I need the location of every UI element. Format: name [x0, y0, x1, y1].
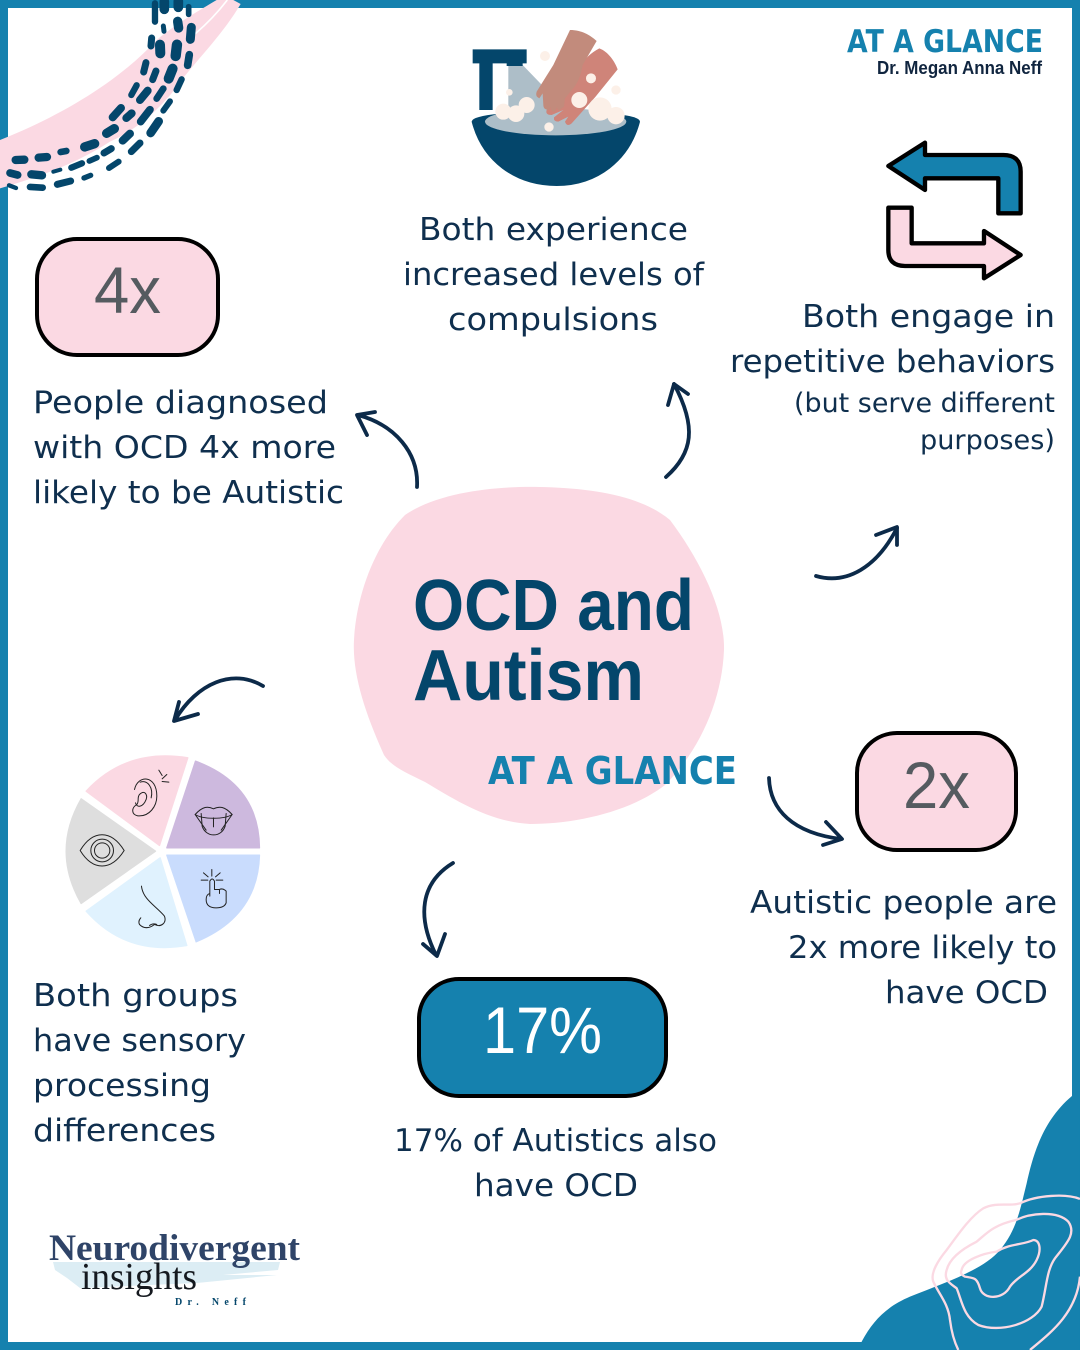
badge: 17%: 17% [483, 993, 602, 1067]
icon: repeat arrows [888, 143, 1021, 278]
text: sensory: differences [33, 1113, 216, 1149]
title: OCD and [413, 566, 694, 646]
sector: sight [66, 799, 155, 903]
text: 2x statistic: Autistic people are [750, 885, 1057, 921]
text: sensory [33, 978, 246, 1149]
text: compulsions: increased levels of [403, 257, 705, 293]
text: 17% statistic [394, 1123, 717, 1204]
arrow: to 17% [423, 863, 453, 956]
icon: tongue [195, 807, 232, 835]
text: 17% statistic: 17% of Autistics also [394, 1123, 717, 1159]
central pink blob [354, 487, 724, 824]
arrow: to repetitive behaviors [816, 527, 897, 578]
text: repetitive behaviors: purposes) [920, 425, 1055, 456]
sector: hearing [86, 756, 188, 845]
sector: touch [167, 855, 259, 942]
arrow: to sensory [174, 678, 263, 721]
title: Autism [413, 636, 644, 716]
icon: nose [139, 886, 165, 928]
text: 2x statistic: have OCD [885, 975, 1048, 1011]
text: 2x statistic [750, 885, 1057, 1011]
icon: ear [133, 770, 169, 816]
text: compulsions: compulsions [448, 302, 658, 338]
text: sensory: processing [33, 1068, 211, 1104]
subtitle: AT A GLANCE [488, 749, 737, 793]
sector: taste [167, 761, 259, 848]
text: 2x statistic: 2x more likely to [788, 930, 1057, 966]
text: repetitive behaviors: Both engage in [802, 299, 1055, 335]
header: at a glance [847, 24, 1043, 78]
icon: hand washing in bowl [473, 30, 639, 185]
text: 4x statistic: with OCD 4x more [33, 430, 336, 466]
badge: 17% [419, 979, 666, 1096]
sector: smell [86, 858, 187, 948]
logo: Neurodivergent insights: Dr. Neff [175, 1297, 247, 1308]
badge: 4x [37, 239, 218, 355]
badge: 2x: 2x [903, 748, 970, 822]
text: sensory: Both groups [33, 978, 238, 1014]
text: 4x statistic: People diagnosed [33, 385, 328, 421]
logo: Neurodivergent insights [49, 1228, 301, 1308]
arrow: to compulsions [666, 384, 689, 477]
title [413, 566, 694, 716]
text: sensory: have sensory [33, 1023, 246, 1059]
badge: 2x [857, 733, 1016, 850]
text: repetitive behaviors: repetitive behaviors [730, 344, 1055, 380]
text: compulsions [403, 212, 705, 338]
icon: touch hand [201, 869, 226, 908]
text: 4x statistic: likely to be Autistic [33, 475, 344, 511]
header: at a glance: Dr. Megan Anna Neff [877, 58, 1043, 78]
logo: Neurodivergent insights: insights [81, 1256, 197, 1298]
arrow: to 4x [357, 412, 417, 487]
text: 17% statistic: have OCD [474, 1168, 638, 1204]
text: 4x statistic [33, 385, 344, 511]
text: compulsions: Both experience [419, 212, 688, 248]
logo: Neurodivergent insights: Neurodivergent [49, 1228, 301, 1269]
text: repetitive behaviors: (but serve different [794, 388, 1055, 419]
icon: five senses wheel [66, 756, 259, 948]
text: repetitive behaviors [730, 299, 1055, 456]
decoration: top-left brush stroke with dashes [0, 0, 241, 188]
arrow: to 2x [769, 778, 842, 845]
header: at a glance: AT A GLANCE [847, 24, 1043, 60]
decoration: bottom-right blue blob with contour lines [862, 1090, 1080, 1350]
icon: eye [80, 835, 124, 866]
badge: 4x: 4x [94, 253, 161, 327]
